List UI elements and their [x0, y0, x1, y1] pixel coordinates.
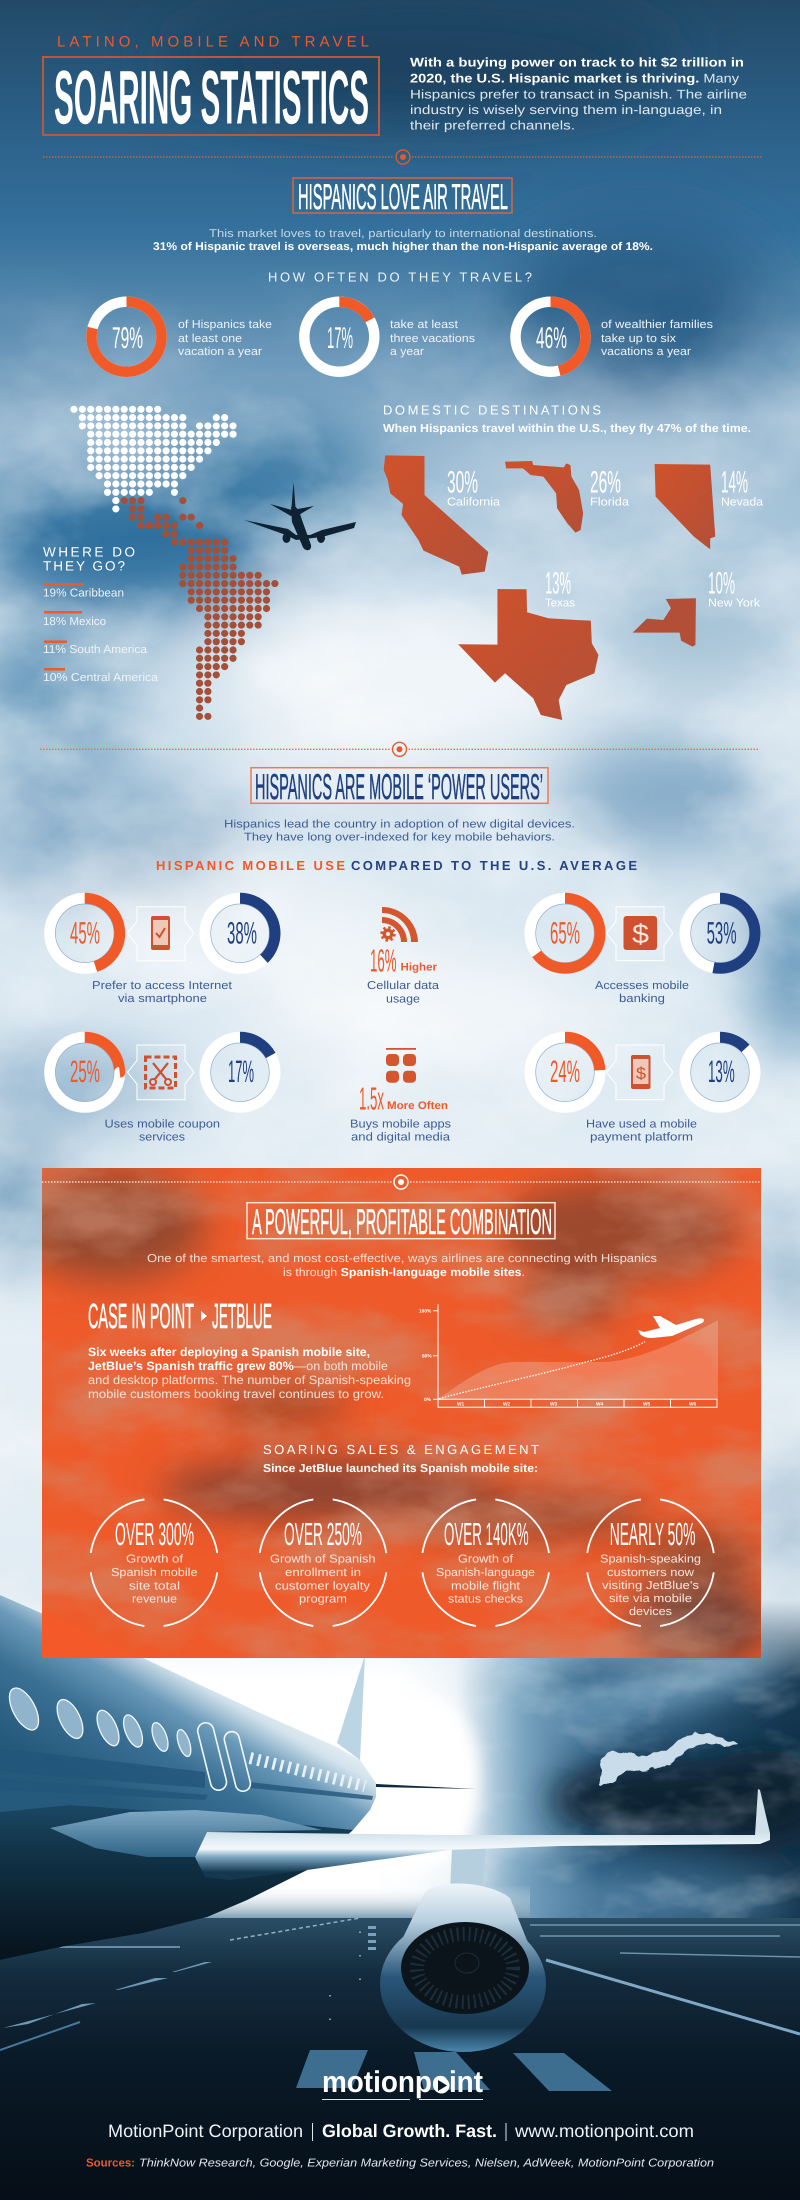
header kicker: LATINO, MOBILE AND TRAVEL — [57, 34, 369, 51]
state: Texas: Texas — [545, 598, 575, 610]
case paragraph: mobile customers booking travel continues to grow. — [88, 1387, 384, 1401]
icon: signal and gear — [382, 907, 418, 942]
comparison: mobile payment: 13% — [708, 1054, 735, 1089]
divider 3 — [42, 1175, 761, 1189]
state: Nevada: Nevada — [721, 496, 764, 508]
stat circle: over 300%: site total — [129, 1580, 180, 1592]
wing fairing — [50, 1810, 322, 1857]
bottom photo: aircraft on runway — [0, 1595, 800, 2200]
icon: phone with check — [151, 916, 170, 950]
stat circle: nearly 50%: devices — [629, 1606, 672, 1618]
title box — [43, 55, 379, 140]
donut: 46% — [516, 302, 586, 372]
icon: dollar tile: $ — [632, 919, 649, 949]
stat circle: over 250%: OVER 250% — [284, 1516, 362, 1552]
stat circle: over 250%: customer loyalty — [275, 1580, 370, 1592]
where do they go legend: 11% South America — [43, 644, 148, 656]
intro paragraph: Hispanics prefer to transact in Spanish. The airline — [410, 87, 747, 101]
stat circle: over 140K% — [422, 1499, 550, 1627]
icon: dollar tile — [624, 916, 657, 950]
comparison: mobile payment — [530, 1037, 755, 1144]
comparison: mobile coupons: Uses mobile coupon — [104, 1119, 220, 1131]
stat: cellular data usage: Higher — [400, 962, 438, 974]
section heading: mobile power users — [251, 766, 548, 807]
stabilizer — [376, 1784, 476, 1789]
comparison: mobile banking: 65% — [550, 915, 580, 950]
stat circle: over 140K%: status checks — [448, 1594, 523, 1606]
where do they go legend: THEY GO? — [43, 559, 125, 574]
comparison: mobile coupons: 17% — [228, 1054, 254, 1089]
stat: mobile apps and digital media: and digital media — [351, 1132, 451, 1144]
where do they go legend — [43, 545, 159, 684]
icon: phone with dollar — [631, 1055, 650, 1089]
donut: 46%: 46% — [536, 322, 567, 355]
comparison: mobile banking: Accesses mobile — [595, 980, 689, 992]
comparison: internet via smartphone: via smartphone — [118, 993, 207, 1005]
stat circle: over 300% — [90, 1499, 218, 1627]
comparison: mobile coupons: 25% — [70, 1054, 100, 1089]
stat: mobile apps and digital media — [350, 1048, 451, 1144]
divider 2 — [40, 742, 759, 756]
donut label: 79%: at least one — [178, 333, 242, 345]
comparison: mobile banking — [530, 898, 755, 1005]
mobile intro text — [224, 818, 575, 844]
donut label: 46%: vacations a year — [601, 346, 691, 358]
icon: app tiles — [386, 1048, 416, 1083]
footer tagline: MotionPoint Corporation — [108, 2121, 303, 2141]
case in point heading: CASE IN POINT — [88, 1297, 194, 1336]
logo: motionpoint: motionpoint — [322, 2066, 483, 2099]
footer tagline: www.motionpoint.com — [514, 2121, 694, 2141]
sunlit cloud band — [600, 1732, 740, 1787]
stat circle: nearly 50%: visiting JetBlue's — [602, 1580, 699, 1592]
intro paragraph — [410, 56, 747, 132]
stat: cellular data usage: 16% — [370, 942, 396, 978]
stat circle: over 140K%: Spanish-language — [436, 1567, 535, 1579]
icon: phone with dollar: $ — [636, 1064, 647, 1083]
comparison: mobile payment: Have used a mobile — [586, 1119, 697, 1131]
soaring sales heading — [263, 1442, 539, 1475]
section heading: Hispanics love air travel — [293, 176, 512, 217]
sources: Sources: — [86, 2158, 135, 2170]
subheading: how often: HOW OFTEN DO THEY TRAVEL? — [268, 270, 532, 285]
donut label: 46% — [601, 319, 713, 358]
domestic destinations heading: DOMESTIC DESTINATIONS — [383, 402, 601, 417]
combination intro text — [147, 1253, 657, 1279]
dot map of the Americas — [74, 409, 275, 716]
chart: traffic growth: W4 — [596, 1401, 604, 1407]
soaring sales heading: Since JetBlue launched its Spanish mobile site: — [263, 1463, 538, 1475]
wing — [195, 1789, 770, 1880]
where do they go legend: 19% Caribbean — [43, 588, 124, 600]
chart: traffic growth: W2 — [503, 1401, 511, 1407]
state: California: California — [447, 496, 501, 508]
comparison: internet via smartphone: Prefer to access Internet — [92, 980, 233, 992]
intro paragraph: With a buying power on track to hit $2 trillion in — [410, 56, 744, 70]
stat circle: over 140K%: OVER 140K% — [444, 1516, 529, 1552]
soaring sales heading: SOARING SALES & ENGAGEMENT — [263, 1442, 539, 1457]
where do they go legend: WHERE DO — [43, 545, 135, 560]
footer tagline: Global Growth. Fast. — [322, 2121, 497, 2141]
comparison: internet via smartphone: 45% — [70, 915, 100, 950]
subheading: mobile use compared: HISPANIC MOBILE USE — [156, 858, 345, 873]
subheading: mobile use compared — [156, 858, 637, 873]
state: Nevada: 14% — [721, 464, 748, 499]
chart: traffic growth: W6 — [689, 1401, 697, 1407]
state: California: 30% — [447, 464, 478, 499]
donut label: 46%: take up to six — [601, 333, 676, 345]
state: Florida — [505, 461, 630, 533]
mobile intro text: Hispanics lead the country in adoption of new digital devices. — [224, 818, 575, 830]
stat circle: over 250%: program — [299, 1594, 347, 1606]
fuselage stripes — [0, 1748, 373, 1800]
intro paragraph: 2020, the U.S. Hispanic market is thriving. Many — [410, 71, 740, 85]
comparison: mobile banking: 53% — [707, 915, 737, 950]
stat: mobile apps and digital media: More Often — [387, 1100, 448, 1112]
where do they go legend: 10% Central America — [43, 672, 159, 684]
domestic destinations heading: When Hispanics travel within the U.S., they fly 47% of the time. — [383, 423, 751, 435]
donut label: 79%: of Hispanics take — [178, 319, 272, 331]
sources: ThinkNow Research, Google, Experian Marketing Services, Nielsen, AdWeek, MotionPoint Corporation — [139, 2158, 714, 2170]
comparison: mobile banking: banking — [619, 993, 665, 1005]
chart: traffic growth: W3 — [550, 1401, 558, 1407]
bottom sky — [144, 1603, 800, 1918]
combination intro text: is through Spanish-language mobile sites . — [283, 1267, 525, 1279]
stat circle: over 250%: enrollment in — [285, 1567, 361, 1579]
donut label: 17% — [390, 319, 475, 358]
stat circle: over 300%: revenue — [132, 1594, 177, 1606]
state: Texas: 13% — [545, 565, 571, 600]
comparison: mobile payment: 24% — [550, 1054, 580, 1089]
infographic canvas: HISPANICS LOVE AIR TRAVEL — [298, 176, 508, 217]
donut label: 79%: vacation a year — [178, 346, 262, 358]
stat circle: over 300%: Spanish mobile — [111, 1567, 198, 1579]
engine pylon — [450, 1848, 486, 1892]
comparison: internet via smartphone — [50, 898, 275, 1005]
state: California — [384, 455, 501, 575]
domestic destinations heading — [383, 402, 751, 435]
chart: traffic growth: 100% — [419, 1308, 432, 1314]
donut label: 17%: three vacations — [390, 333, 475, 345]
stat circle: over 140K%: Growth of — [458, 1554, 514, 1566]
stat circle: nearly 50%: customers now — [607, 1567, 695, 1579]
donut: 79% — [92, 302, 162, 372]
comparison: mobile coupons: services — [139, 1132, 185, 1144]
stat circle: nearly 50% — [586, 1499, 714, 1627]
case paragraph: JetBlue’s Spanish traffic grew 80% —on both mobile — [88, 1359, 388, 1373]
travel intro text: This market loves to travel, particularly to international destinations. — [209, 228, 597, 240]
comparison: mobile payment: payment platform — [590, 1132, 693, 1144]
donut label: 17%: take at least — [390, 319, 459, 331]
state: New York: 10% — [708, 565, 735, 600]
stat circle: nearly 50%: site via mobile — [609, 1593, 692, 1605]
state: Texas — [458, 565, 598, 720]
icon: coupon scissors — [146, 1057, 176, 1088]
infographic canvas: JETBLUE — [212, 1297, 272, 1336]
donut label: 17%: a year — [390, 346, 424, 358]
section heading: powerful combination — [247, 1201, 555, 1242]
comparison: mobile coupons — [50, 1037, 275, 1144]
comparison: internet via smartphone: 38% — [227, 915, 257, 950]
chart: traffic growth: 80% — [422, 1354, 432, 1360]
chart: traffic growth: W1 — [457, 1401, 465, 1407]
donut: 17%: 17% — [327, 322, 353, 355]
lower fuselage — [0, 1805, 353, 1960]
stat: cellular data usage — [367, 907, 440, 1005]
intro paragraph: industry is wisely serving them in-language, in — [410, 103, 722, 117]
stat: mobile apps and digital media: Buys mobile apps — [350, 1119, 451, 1131]
combination intro text: One of the smartest, and most cost-effective, ways airlines are connecting with Hispanics — [147, 1253, 657, 1265]
mobile intro text: They have long over-indexed for key mobile behaviors. — [244, 832, 555, 844]
donut: 17% — [304, 302, 374, 372]
tail fin — [337, 1655, 365, 1760]
engine — [380, 1883, 546, 2052]
state: New York: New York — [708, 598, 760, 610]
stat circle: over 300%: Growth of — [126, 1554, 184, 1566]
icon: white plane — [638, 1316, 704, 1338]
state: Florida: Florida — [590, 496, 630, 508]
panel: orange combination background — [15, 1168, 770, 1665]
travel intro text: 31% of Hispanic travel is overseas, much higher than the non-Hispanic average of 18%. — [153, 241, 653, 253]
icon: airplane silhouette — [244, 482, 356, 550]
subheading: mobile use compared: COMPARED TO THE U.S. AVERAGE — [351, 858, 637, 873]
chart: traffic growth: W5 — [643, 1401, 651, 1407]
stat circle: over 300%: OVER 300% — [115, 1516, 194, 1552]
chart: traffic growth — [419, 1304, 718, 1407]
stat: mobile apps and digital media: 1.5x — [359, 1080, 384, 1116]
donut label: 46%: of wealthier families — [601, 319, 713, 331]
where do they go legend: 18% Mexico — [43, 616, 106, 628]
runway markings — [0, 1918, 800, 2091]
stat circle: over 140K%: mobile flight — [451, 1580, 521, 1592]
stat circle: nearly 50%: Spanish-speaking — [600, 1554, 701, 1566]
donut: 79%: 79% — [112, 322, 143, 355]
stat: cellular data usage: usage — [386, 993, 420, 1005]
chart: traffic growth: 0% — [424, 1397, 432, 1403]
travel intro text — [153, 228, 653, 253]
stat: cellular data usage: Cellular data — [367, 980, 440, 992]
cabin windows — [3, 1684, 365, 1793]
donut label: 79% — [178, 319, 272, 358]
runway ground — [0, 1918, 800, 2200]
stat circle: over 250% — [259, 1499, 387, 1627]
case paragraph: Six weeks after deploying a Spanish mobile site, — [88, 1345, 370, 1359]
state: Nevada — [655, 464, 764, 549]
case paragraph: and desktop platforms. The number of Spanish-speaking — [88, 1373, 411, 1387]
stat circle: over 250%: Growth of Spanish — [270, 1554, 376, 1566]
case paragraph — [88, 1345, 411, 1401]
state: New York — [633, 565, 760, 647]
state: Florida: 26% — [590, 464, 621, 499]
footer tagline — [108, 2121, 694, 2141]
intro paragraph: their preferred channels. — [410, 118, 575, 132]
aircraft fuselage — [0, 1595, 376, 1960]
divider 1 — [43, 150, 763, 164]
